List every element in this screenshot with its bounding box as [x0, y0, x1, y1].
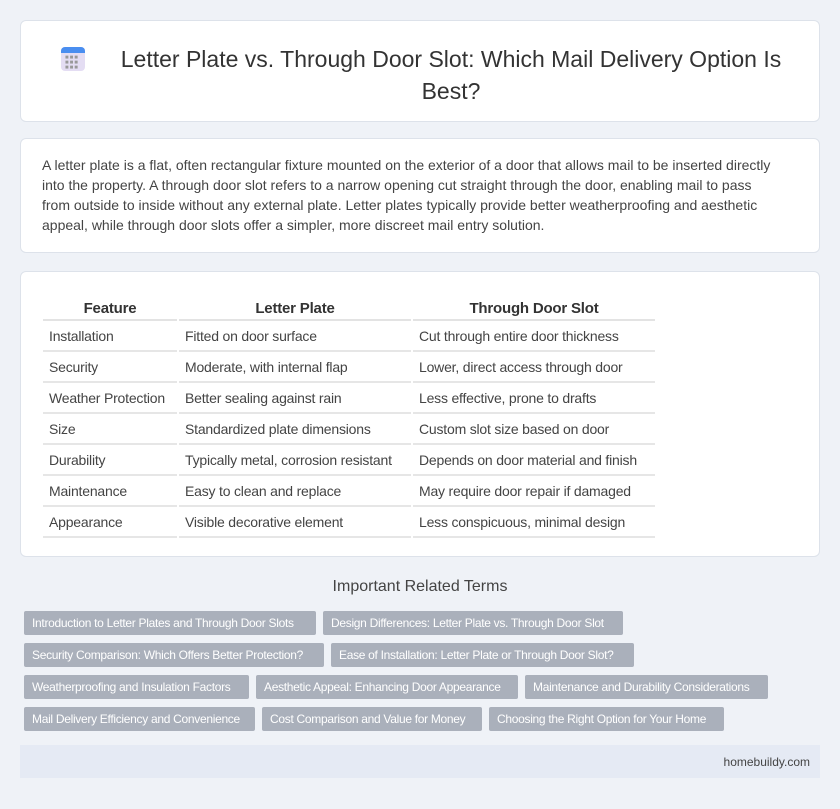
comparison table: Size	[49, 420, 75, 436]
icon: calendar: ■■■	[65, 55, 79, 61]
comparison table: Less conspicuous, minimal design	[419, 514, 625, 530]
tags: Choosing the Right Option for Your Home	[497, 712, 706, 726]
comparison table: Less effective, prone to drafts	[419, 390, 596, 406]
comparison table: Maintenance	[49, 482, 127, 498]
comparison table: Letter Plate	[255, 300, 335, 316]
intro text	[20, 138, 820, 253]
comparison table: Depends on door material and finish	[419, 452, 637, 468]
title card	[20, 20, 820, 122]
tags: Aesthetic Appeal: Enhancing Door Appearance	[264, 680, 501, 694]
icon: calendar	[61, 47, 85, 71]
comparison table: Typically metal, corrosion resistant	[185, 452, 392, 468]
tags: Design Differences: Letter Plate vs. Through Door Slot	[331, 616, 604, 630]
comparison table: Better sealing against rain	[185, 390, 341, 406]
comparison table: Custom slot size based on door	[419, 420, 609, 436]
comparison table: Through Door Slot	[469, 300, 599, 316]
comparison table: Security	[49, 358, 98, 374]
comparison table: Easy to clean and replace	[185, 482, 341, 498]
tags: Security Comparison: Which Offers Better Protection?	[32, 648, 303, 662]
related terms heading: Important Related Terms	[333, 578, 507, 595]
tags: Mail Delivery Efficiency and Convenience	[32, 712, 240, 726]
comparison table: Appearance	[49, 514, 123, 530]
comparison table: Standardized plate dimensions	[185, 420, 371, 436]
comparison table: Fitted on door surface	[185, 328, 317, 344]
comparison table: Cut through entire door thickness	[419, 328, 619, 344]
comparison table card	[20, 271, 820, 557]
comparison table: Weather Protection	[49, 390, 165, 406]
tags: Maintenance and Durability Considerations	[533, 680, 750, 694]
comparison table	[43, 300, 655, 538]
comparison table: Lower, direct access through door	[419, 358, 623, 374]
intro text: A letter plate is a flat, often rectangular fixture mounted on the exterior of a door that allows mail to be inserted directly into the property. A through door slot refers to a narrow opening cut straight through the door, enabling mail to pass from outside to inside without any external plate. Letter plates typically provide better weatherproofing and aesthetic appeal, while through door slots offer a simpler, more discreet mail entry solution.	[42, 157, 770, 233]
comparison table: Moderate, with internal flap	[185, 358, 348, 374]
tags: Weatherproofing and Insulation Factors	[32, 680, 231, 694]
comparison table: Installation	[49, 328, 114, 344]
tags: Ease of Installation: Letter Plate or Through Door Slot?	[339, 648, 613, 662]
tags: Cost Comparison and Value for Money	[270, 712, 465, 726]
comparison table: Feature	[84, 300, 136, 316]
comparison table: May require door repair if damaged	[419, 482, 631, 498]
icon: calendar: ■■■	[65, 65, 79, 71]
footer	[20, 745, 820, 778]
comparison table: Durability	[49, 452, 105, 468]
icon: calendar: ■■■	[65, 60, 79, 66]
title: Letter Plate vs. Through Door Slot: Which Mail Delivery Option Is Best?	[121, 46, 781, 104]
tags: Introduction to Letter Plates and Through Door Slots	[32, 616, 294, 630]
comparison table: Visible decorative element	[185, 514, 343, 530]
footer: homebuildy.com	[724, 755, 810, 769]
